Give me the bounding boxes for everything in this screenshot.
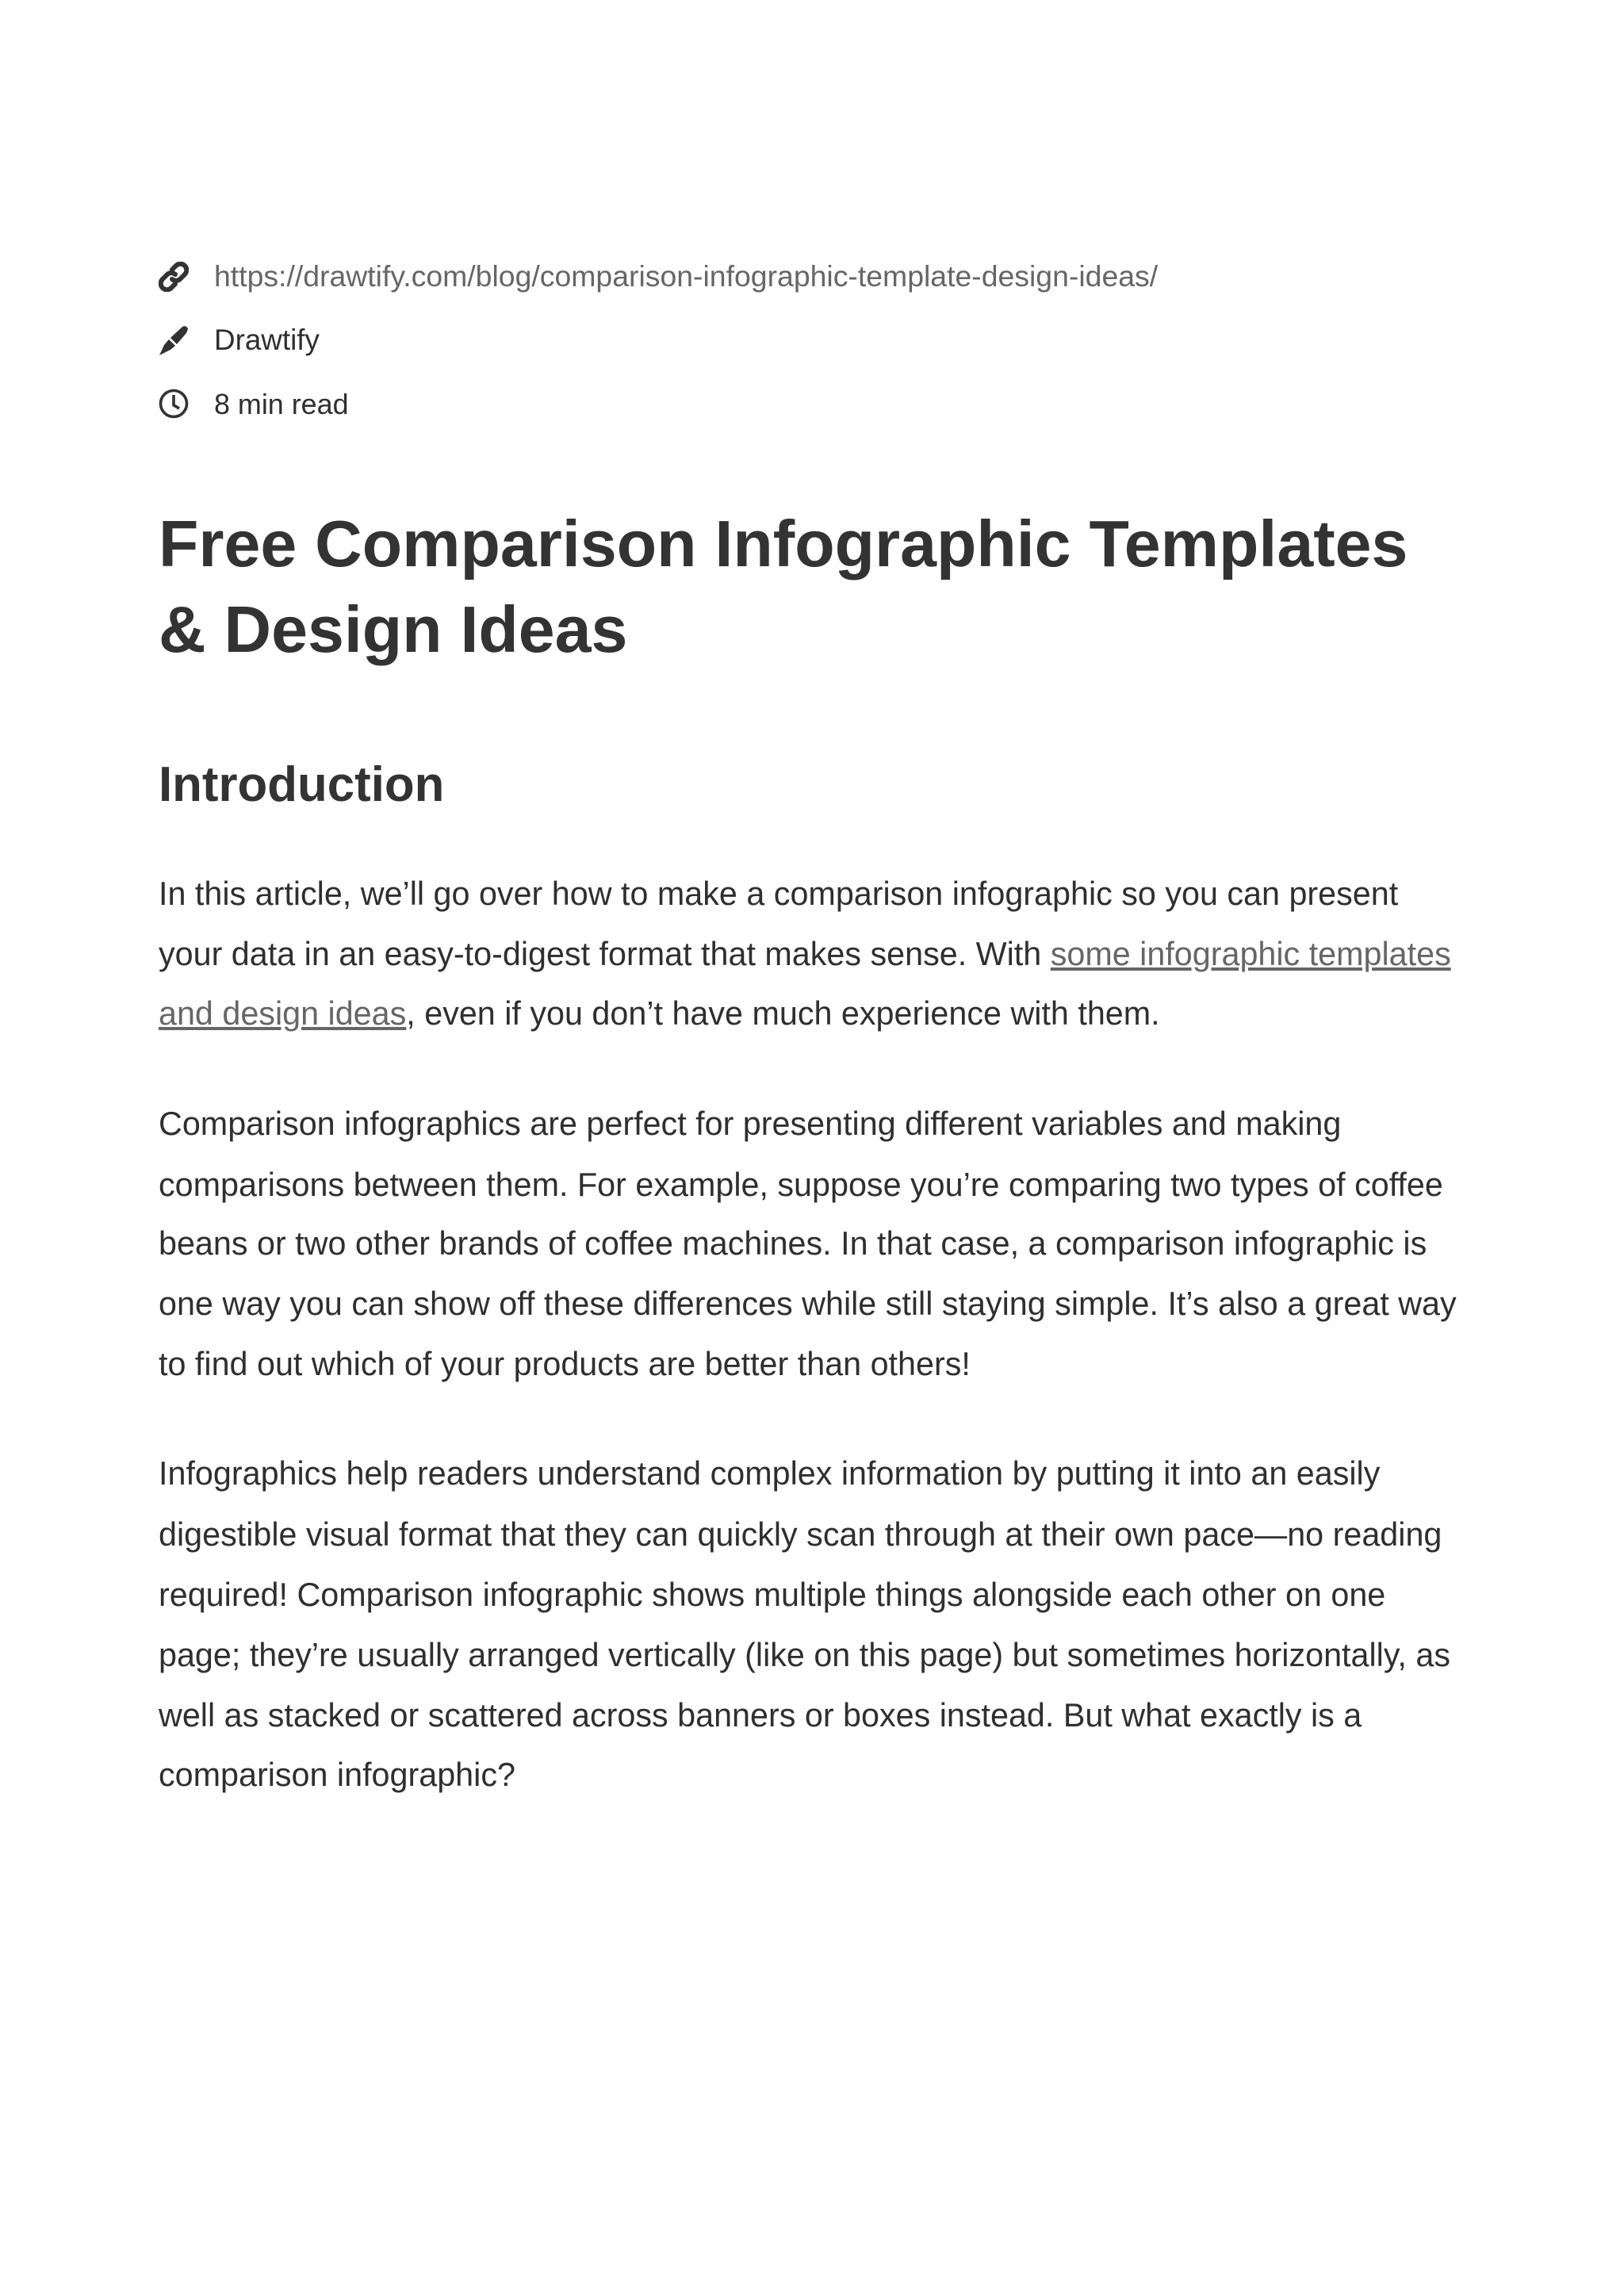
paragraph 2: to find out which of your products are better than others!	[159, 1346, 971, 1382]
paragraph 2: beans or two other brands of coffee machines. In that case, a comparison infographic is	[159, 1225, 1427, 1262]
author: Drawtify	[214, 324, 320, 356]
paragraph 1: and design ideas, even if you don’t have much experience with them.	[159, 995, 1160, 1032]
icon: link	[159, 262, 189, 292]
source url: https://drawtify.com/blog/comparison-infographic-template-design-ideas/	[214, 259, 1158, 293]
paragraph 2: one way you can show off these differences while still staying simple. It’s also a great way	[159, 1285, 1457, 1322]
paragraph 2: Comparison infographics are perfect for presenting different variables and making	[159, 1105, 1341, 1142]
title	[159, 508, 1408, 666]
paragraph 3: Infographics help readers understand complex information by putting it into an easily	[159, 1455, 1380, 1492]
title: Free Comparison Infographic Templates	[159, 508, 1408, 580]
icon: pen	[159, 326, 188, 355]
paragraph 1: In this article, we’ll go over how to make a comparison infographic so you can present	[159, 875, 1398, 912]
paragraph 3: required! Comparison infographic shows multiple things alongside each other on one	[159, 1577, 1385, 1613]
paragraph 1: your data in an easy-to-digest format that makes sense. With some infographic templates	[159, 936, 1451, 972]
paragraph 3	[159, 1455, 1450, 1793]
title: & Design Ideas	[159, 593, 627, 666]
paragraph 1	[159, 875, 1451, 1032]
icon: clock	[159, 389, 189, 419]
paragraph 2	[159, 1105, 1457, 1382]
paragraph 2: comparisons between them. For example, suppose you’re comparing two types of coffee	[159, 1167, 1443, 1203]
metadata block	[159, 259, 1158, 420]
read time: 8 min read	[214, 389, 349, 420]
heading: introduction: Introduction	[159, 757, 444, 812]
paragraph 3: well as stacked or scattered across banners or boxes instead. But what exactly is a	[159, 1697, 1362, 1734]
paragraph 3: comparison infographic?	[159, 1757, 515, 1793]
paragraph 3: digestible visual format that they can quickly scan through at their own pace—no reading	[159, 1516, 1442, 1553]
paragraph 3: page; they’re usually arranged vertically (like on this page) but sometimes horizontally, as	[159, 1637, 1450, 1673]
